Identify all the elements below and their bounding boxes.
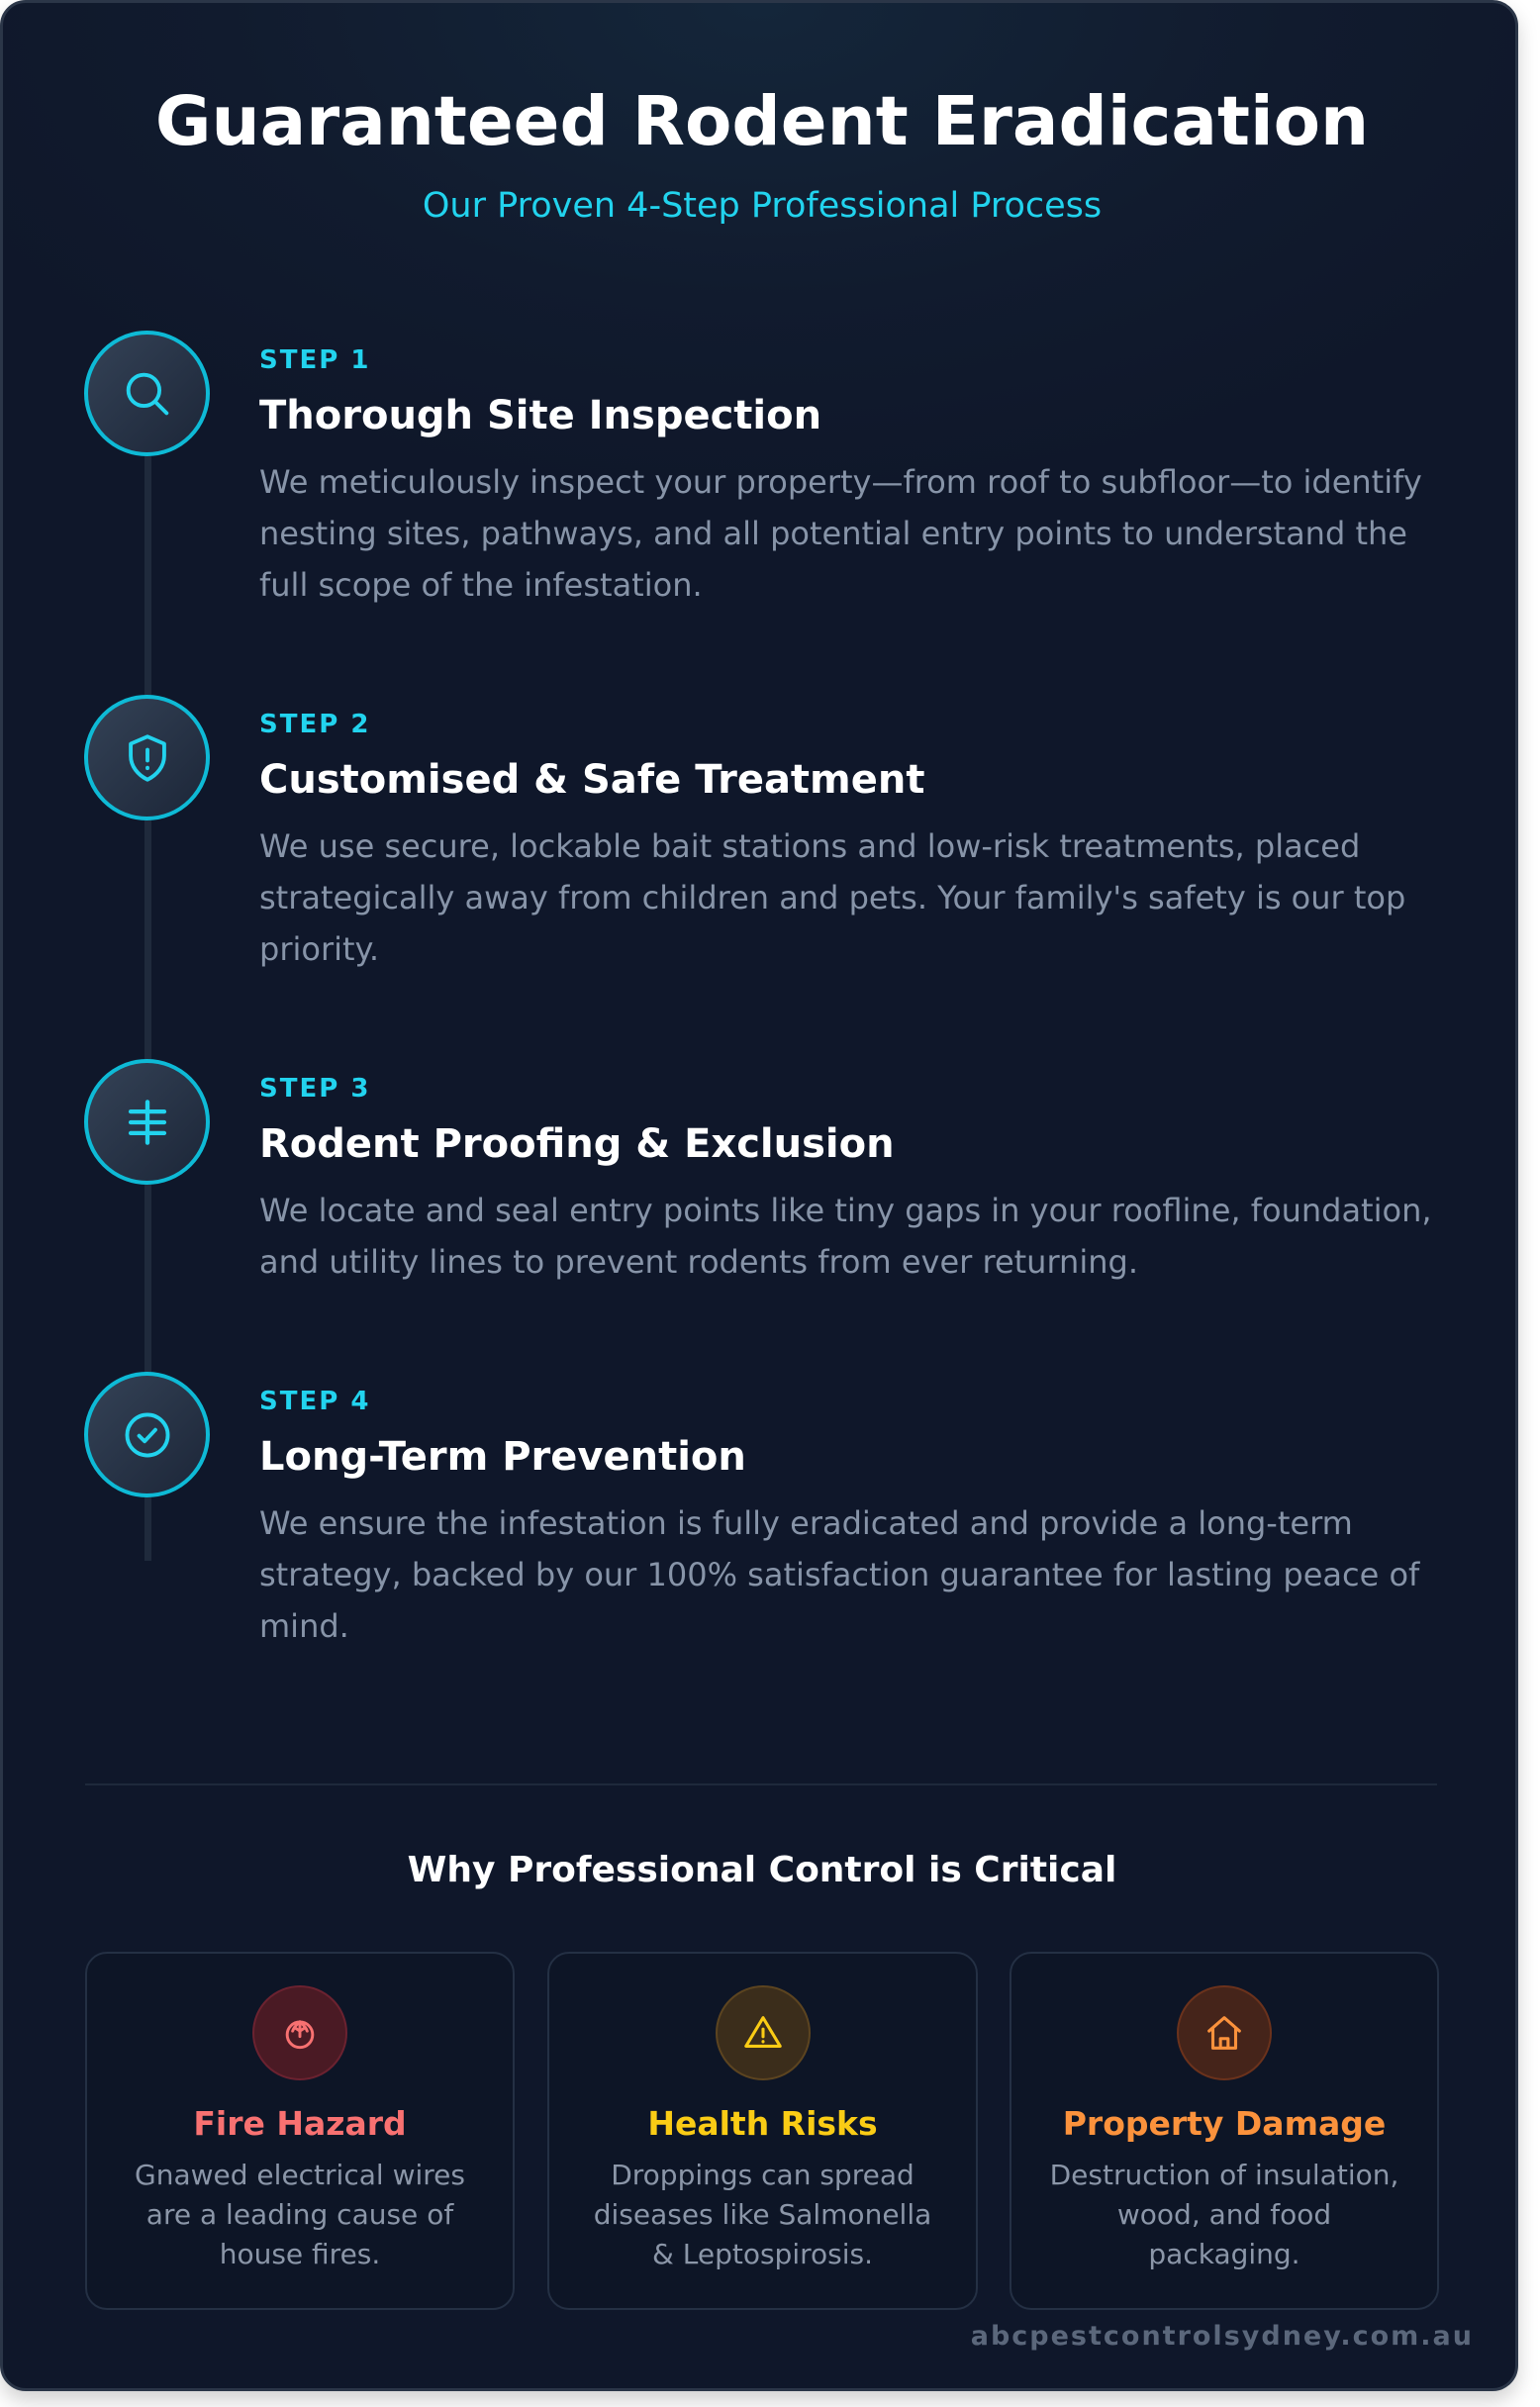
icon: step 3 barrier [84, 1059, 210, 1185]
icon: step 1 search [84, 331, 210, 456]
panel: health risks: Droppings can spread diseases like Salmonella & Leptospirosis. [594, 2159, 931, 2270]
step 3 text [259, 1074, 1432, 1281]
panel: fire hazard: Gnawed electrical wires are a leading cause of house fires. [135, 2159, 465, 2270]
icon: step 4 check [84, 1372, 210, 1497]
title: Guaranteed Rodent Eradication [155, 82, 1369, 161]
step 4 text: Long-Term Prevention [259, 1434, 746, 1480]
step 1 text: Thorough Site Inspection [259, 393, 821, 438]
section heading: Why Professional Control is Critical [408, 1850, 1116, 1890]
icon: warning [715, 1985, 810, 2080]
panel: fire hazard: Fire Hazard [193, 2104, 407, 2143]
step 3 text: STEP 3 [259, 1074, 370, 1104]
panel: health risks: Health Risks [647, 2104, 878, 2143]
step 4 text: We ensure the infestation is fully eradicated and provide a long-term strategy, backed by our 100% satisfaction guarantee for lasting peace of mind. [259, 1504, 1419, 1645]
panel: property damage: Property Damage [1063, 2104, 1386, 2143]
step 2 text: Customised & Safe Treatment [259, 757, 924, 803]
step 1 text: We meticulously inspect your property—from roof to subfloor—to identify nesting sites, pathways, and all potential entry points to understand the full scope of the infestation. [259, 463, 1422, 604]
panel: property damage [1010, 1952, 1439, 2310]
step 3 text: We locate and seal entry points like tiny gaps in your roofline, foundation, and utility lines to prevent rodents from ever returning. [259, 1192, 1432, 1281]
subtitle: Our Proven 4-Step Professional Process [423, 186, 1102, 226]
icon: step 2 shield [84, 695, 210, 820]
icon: fire [252, 1985, 347, 2080]
step 2 text [259, 710, 1405, 968]
step 1 text [259, 345, 1422, 604]
panel: property damage: wood, and food [1117, 2198, 1331, 2231]
step 2 text: STEP 2 [259, 710, 370, 739]
timeline line [144, 395, 151, 1561]
panel: property damage: Destruction of insulation, [1050, 2159, 1398, 2191]
icon: house [1177, 1985, 1272, 2080]
step 4 text: STEP 4 [259, 1387, 370, 1416]
panel: health risks [547, 1952, 978, 2310]
step 3 text: Rodent Proofing & Exclusion [259, 1121, 895, 1167]
panel: fire hazard [85, 1952, 515, 2310]
step 4 text [259, 1387, 1420, 1645]
step 2 text: We use secure, lockable bait stations and low-risk treatments, placed strategically away from children and pets. Your family's safety is our top priority. [259, 827, 1405, 968]
panel: property damage: packaging. [1148, 2238, 1300, 2270]
step 1 text: STEP 1 [259, 345, 370, 375]
footer url: abcpestcontrolsydney.com.au [971, 2321, 1474, 2352]
